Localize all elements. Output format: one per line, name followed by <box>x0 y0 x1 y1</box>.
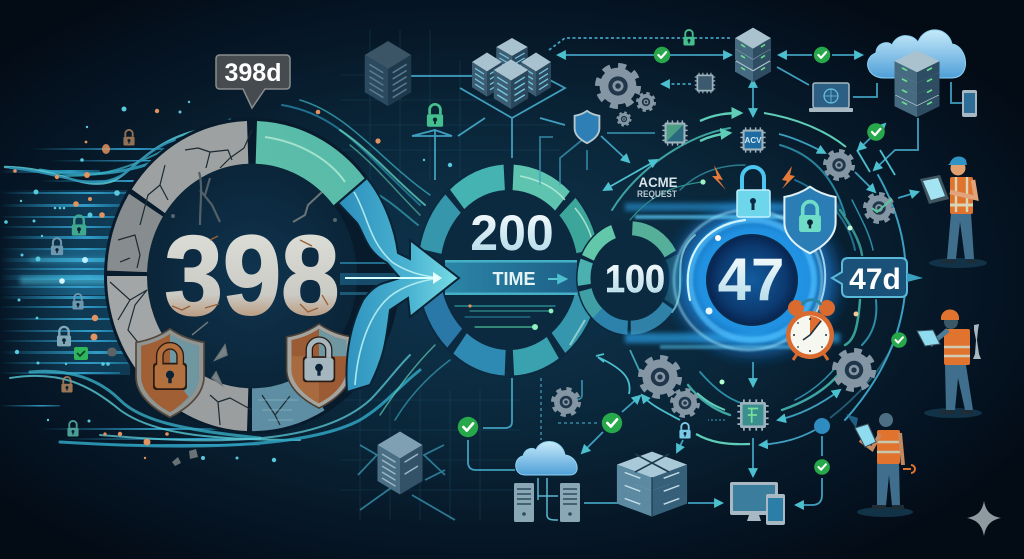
laptop <box>809 83 853 112</box>
worker: bottom <box>846 413 915 517</box>
icon: green lock top <box>427 104 443 127</box>
ring: 47 glow <box>625 192 851 368</box>
chip: small top <box>695 73 715 93</box>
label: ACME REQUEST: REQUEST <box>637 189 677 200</box>
gears top <box>598 66 853 179</box>
ring: 100 translucent right side <box>584 228 676 328</box>
number: 398: 398 <box>164 213 340 338</box>
cracks <box>110 130 290 425</box>
alarm clock <box>786 300 835 360</box>
watermark star <box>967 501 1001 536</box>
small padlocks on the left <box>51 130 198 466</box>
big merging arrow <box>338 178 459 392</box>
ring: 100 <box>576 220 684 336</box>
bottom network lines <box>358 340 895 520</box>
callout: 47d: 47d <box>849 263 901 296</box>
stacked server top <box>735 28 771 82</box>
shield: blue lock <box>784 187 836 253</box>
label: ACME REQUEST: ACME <box>638 174 678 190</box>
label: ACME REQUEST <box>637 174 678 200</box>
checks top row <box>654 47 885 141</box>
worker: top <box>920 157 987 268</box>
shield: small blue <box>575 111 599 143</box>
lock: glowing <box>737 167 770 217</box>
server: top left <box>365 41 411 106</box>
rust shield left <box>136 329 204 417</box>
chip: green <box>662 120 688 146</box>
arcs around 47 <box>612 128 906 420</box>
number: 47: 47 <box>718 246 784 313</box>
gear: check gear <box>865 194 893 222</box>
storage cube <box>617 452 687 517</box>
scattered particles <box>4 101 452 462</box>
worker: middle <box>917 309 982 418</box>
chip bottom <box>737 399 769 431</box>
label: ACV: ACV <box>745 136 762 145</box>
icon: lock bottom <box>679 423 691 438</box>
chip: ACV <box>740 127 766 153</box>
servers below cloud <box>514 478 580 522</box>
cloud and server stack <box>868 30 966 117</box>
checks bottom <box>458 332 907 475</box>
rust shield right <box>287 324 351 408</box>
grid lines <box>340 30 560 520</box>
callout: 47d <box>832 258 923 297</box>
callout: 398d: 398d <box>225 59 281 87</box>
number: 200: 200 <box>470 205 554 261</box>
server: bottom left <box>378 432 422 494</box>
lightning bolts <box>712 165 795 190</box>
monitor and tablet <box>730 482 785 525</box>
phone <box>962 90 977 117</box>
time band: TIME <box>492 269 536 289</box>
callout: 398d <box>216 55 290 108</box>
data lines under time band <box>455 304 555 330</box>
ring: 200 <box>416 162 602 378</box>
icon: top lock on dashed line <box>683 30 695 45</box>
number: 100: 100 <box>605 258 665 301</box>
top network lines <box>410 38 962 198</box>
gears bottom <box>553 351 873 416</box>
cloud bottom <box>516 442 577 475</box>
left speed streaks <box>0 148 260 446</box>
left flow curves <box>5 100 450 446</box>
panel: 398 cracked ring <box>104 118 400 434</box>
server cluster <box>472 38 551 109</box>
arrow center band <box>340 262 440 295</box>
time band <box>445 260 577 295</box>
